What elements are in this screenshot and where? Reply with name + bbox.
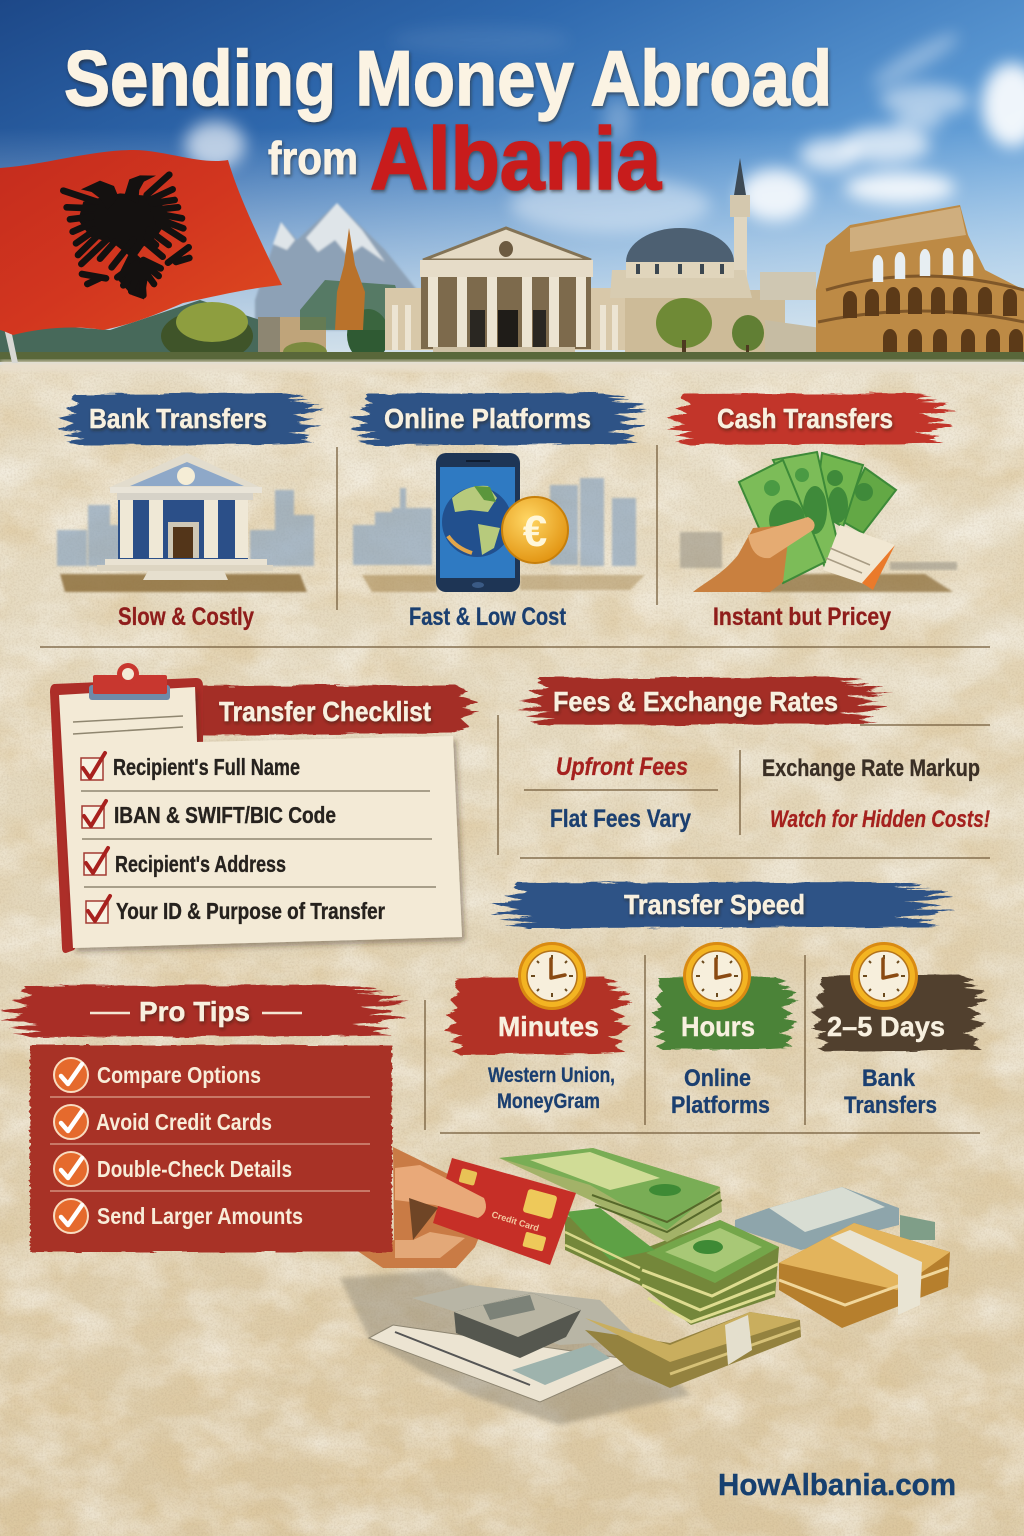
tip: double-check details: Double-Check Details <box>97 1156 292 1182</box>
ground strip <box>0 352 1024 371</box>
speed card: minutes: MoneyGram <box>497 1090 600 1113</box>
bottom gold stack <box>585 1312 801 1388</box>
title <box>64 34 832 208</box>
clipboard board <box>50 678 203 953</box>
gold band stack <box>779 1223 950 1328</box>
mosque with dome and minaret <box>610 158 878 357</box>
panel: transfer speed <box>445 882 988 1119</box>
banner: transfer speed: Transfer Speed <box>624 889 805 920</box>
red credit card: Credit Card <box>490 1209 540 1233</box>
speed card: hours <box>651 942 799 1119</box>
caption: fast and low cost: Fast & Low Cost <box>409 603 567 631</box>
dark grey stack <box>454 1293 581 1358</box>
banner: fees and exchange rates <box>518 677 893 725</box>
item: recipient full name <box>81 753 300 780</box>
website credit: HowAlbania.com <box>718 1467 956 1502</box>
panel: online platforms <box>350 393 650 631</box>
banner: cash transfers: Cash Transfers <box>717 403 893 434</box>
banner: bank transfers <box>58 393 325 445</box>
icon: phone with globe and euro coin <box>353 453 645 592</box>
double-headed eagle <box>63 175 189 299</box>
tip: avoid credit cards <box>54 1105 272 1139</box>
speed card: 2 to 5 days: 2–5 Days <box>827 1011 945 1042</box>
icon: hand holding cash <box>680 452 957 592</box>
icon: bank building <box>57 453 314 592</box>
flag cloth <box>0 150 282 335</box>
banner: fees and exchange rates: Fees & Exchange Rates <box>553 686 838 717</box>
panel: transfer checklist <box>50 663 480 953</box>
icon: clock <box>518 942 586 1010</box>
back blue stack <box>735 1187 935 1250</box>
header scene: sky and landmarks <box>0 0 1024 371</box>
columned temple <box>385 228 628 361</box>
colosseum <box>816 205 1024 358</box>
speed card: 2 to 5 days <box>811 942 988 1119</box>
text: upfront fees: Upfront Fees <box>556 753 688 781</box>
tip: compare options: Compare Options <box>97 1062 261 1088</box>
banner: transfer checklist: Transfer Checklist <box>219 696 431 727</box>
icon: phone with globe and euro coin: € <box>523 507 547 556</box>
tips panel background <box>30 1045 392 1252</box>
checklist paper <box>59 687 462 948</box>
thumb <box>395 1165 486 1218</box>
banner: transfer checklist <box>196 685 480 735</box>
speed card: 2 to 5 days: Transfers <box>844 1092 937 1119</box>
tip: send larger amounts <box>54 1199 303 1233</box>
banner: cash transfers <box>667 393 955 445</box>
tip: compare options <box>54 1058 261 1092</box>
item: recipient full name: Recipient's Full Name <box>113 754 300 780</box>
caption: instant but pricey: Instant but Pricey <box>713 603 891 631</box>
hills and trees at left <box>0 280 410 362</box>
text: flat fees vary: Flat Fees Vary <box>550 805 691 833</box>
title word: from: from <box>268 132 358 184</box>
clipboard clip <box>89 663 170 700</box>
speed card: hours: Online <box>684 1065 751 1092</box>
icon: clock <box>683 942 751 1010</box>
ground shadow <box>340 1270 690 1425</box>
panel: cash transfers <box>667 393 957 631</box>
mountains <box>255 203 430 330</box>
speed card: 2 to 5 days: Bank <box>862 1065 916 1092</box>
flag pole <box>0 277 18 363</box>
illustration: card, hand and money stacks <box>340 1147 950 1425</box>
finger gap <box>409 1198 438 1240</box>
panel: pro tips <box>0 985 410 1252</box>
red credit card <box>433 1158 576 1265</box>
hand <box>356 1147 490 1268</box>
paper banknotes <box>369 1285 640 1402</box>
banner: online platforms <box>350 393 650 445</box>
tip: double-check details <box>54 1152 292 1186</box>
item: recipient address <box>84 848 286 877</box>
speed card: minutes <box>445 942 633 1113</box>
banner: pro tips <box>0 985 410 1037</box>
item: recipient address: Recipient's Address <box>115 851 286 877</box>
sky <box>0 0 1024 365</box>
title word: Albania: Albania <box>370 109 662 208</box>
speed card: hours: Platforms <box>671 1092 770 1119</box>
flag of Albania <box>0 150 282 363</box>
banner: pro tips: Pro Tips <box>139 996 250 1027</box>
speed card: minutes: Western Union, <box>488 1064 615 1087</box>
panel: fees and exchange rates <box>518 677 990 833</box>
caption: slow and costly: Slow & Costly <box>118 603 254 631</box>
item: id and purpose of transfer: Your ID & Purpose of Transfer <box>116 898 385 924</box>
church tower <box>335 228 365 330</box>
speed card: minutes: Minutes <box>498 1011 599 1042</box>
palm shading <box>395 1232 465 1258</box>
item: iban and swift code: IBAN & SWIFT/BIC Code <box>114 802 336 828</box>
text: exchange rate markup: Exchange Rate Markup <box>762 755 980 782</box>
upper green stack <box>499 1148 722 1242</box>
banner: transfer speed <box>490 882 960 928</box>
tip: avoid credit cards: Avoid Credit Cards <box>96 1109 272 1135</box>
banner: online platforms: Online Platforms <box>384 403 591 434</box>
lower green stack <box>565 1208 779 1325</box>
speed card: hours: Hours <box>681 1011 755 1042</box>
tip: send larger amounts: Send Larger Amounts <box>97 1203 303 1229</box>
banner: bank transfers: Bank Transfers <box>89 403 267 434</box>
panel: bank transfers <box>57 393 325 631</box>
title line 1: Sending Money Abroad <box>64 34 832 122</box>
icon: clock <box>850 942 918 1010</box>
